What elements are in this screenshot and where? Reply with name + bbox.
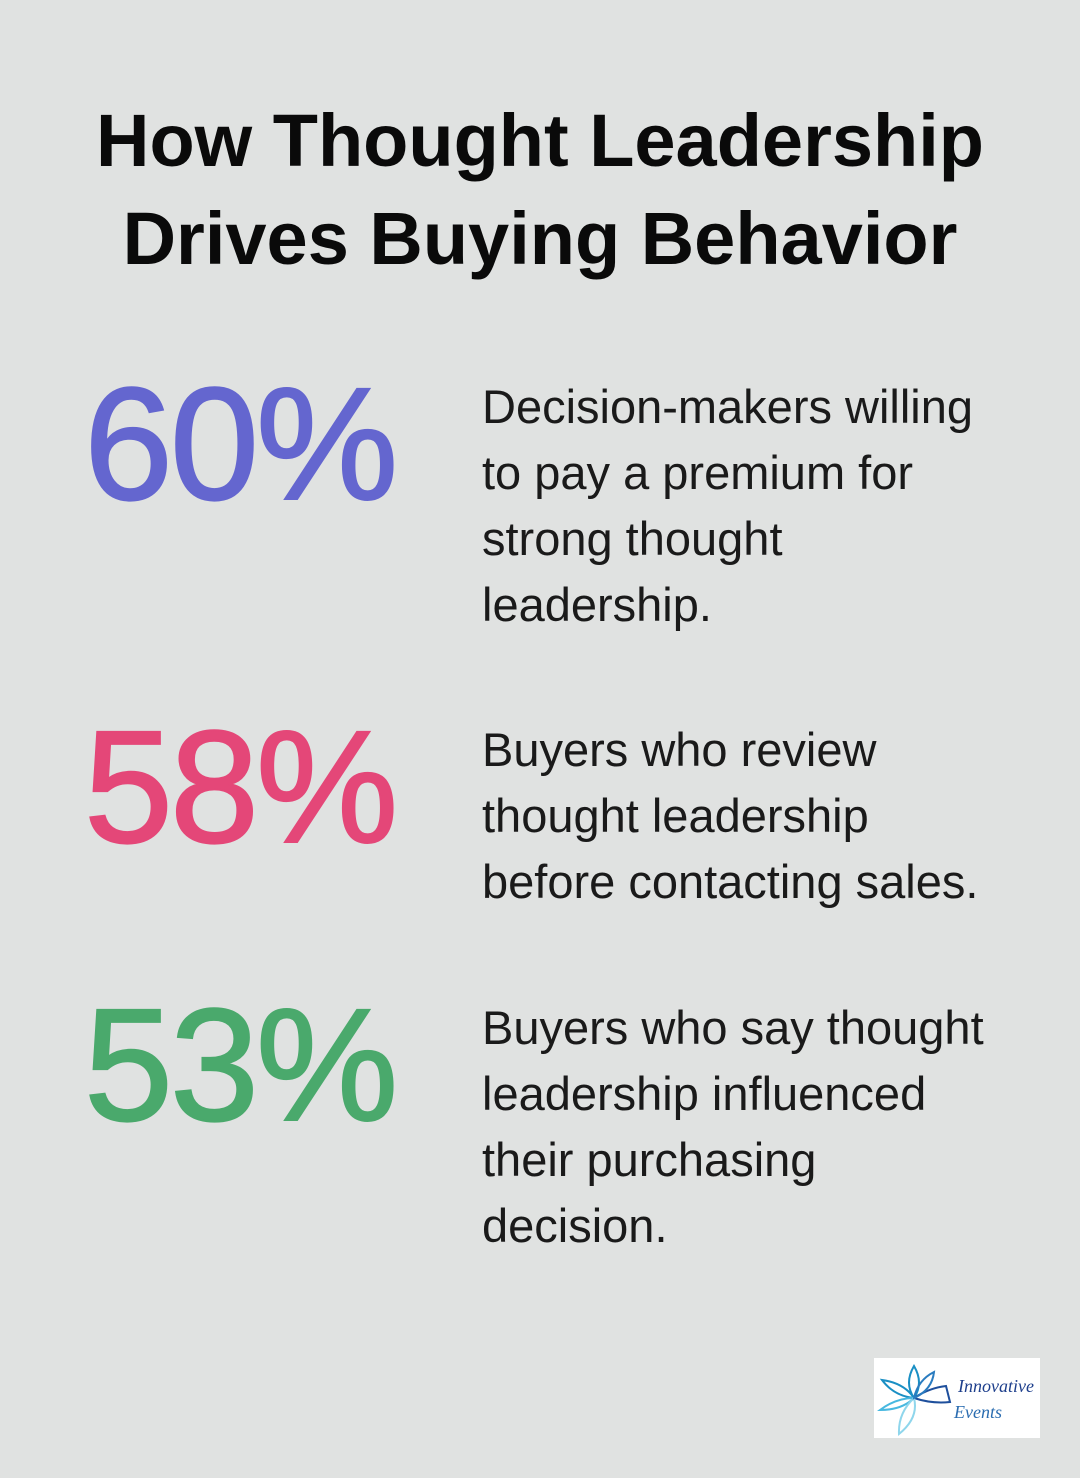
stat: 58%: 58%	[84, 697, 395, 876]
logo	[874, 1358, 1040, 1438]
title: How Thought Leadership	[96, 99, 984, 182]
text: 53% description: Buyers who say thought	[482, 1001, 984, 1054]
text: 60% description: leadership.	[482, 578, 712, 631]
text: 60% description: to pay a premium for	[482, 446, 913, 499]
logo: Innovative	[957, 1376, 1034, 1396]
title	[96, 99, 984, 280]
text: 60% description	[482, 380, 973, 631]
text: 58% description: thought leadership	[482, 789, 869, 842]
stat: 53%: 53%	[84, 975, 395, 1154]
text: 53% description: their purchasing	[482, 1133, 816, 1186]
text: 53% description: leadership influenced	[482, 1067, 926, 1120]
text: 58% description: Buyers who review	[482, 723, 876, 776]
text: 58% description: before contacting sales.	[482, 855, 978, 908]
text: 60% description: Decision-makers willing	[482, 380, 973, 433]
text: 53% description: decision.	[482, 1199, 668, 1252]
logo: Events	[953, 1402, 1002, 1422]
title: Drives Buying Behavior	[123, 197, 957, 280]
text: 53% description	[482, 1001, 984, 1252]
text: 58% description	[482, 723, 978, 908]
text: 60% description: strong thought	[482, 512, 782, 565]
stat: 60%: 60%	[84, 354, 395, 533]
